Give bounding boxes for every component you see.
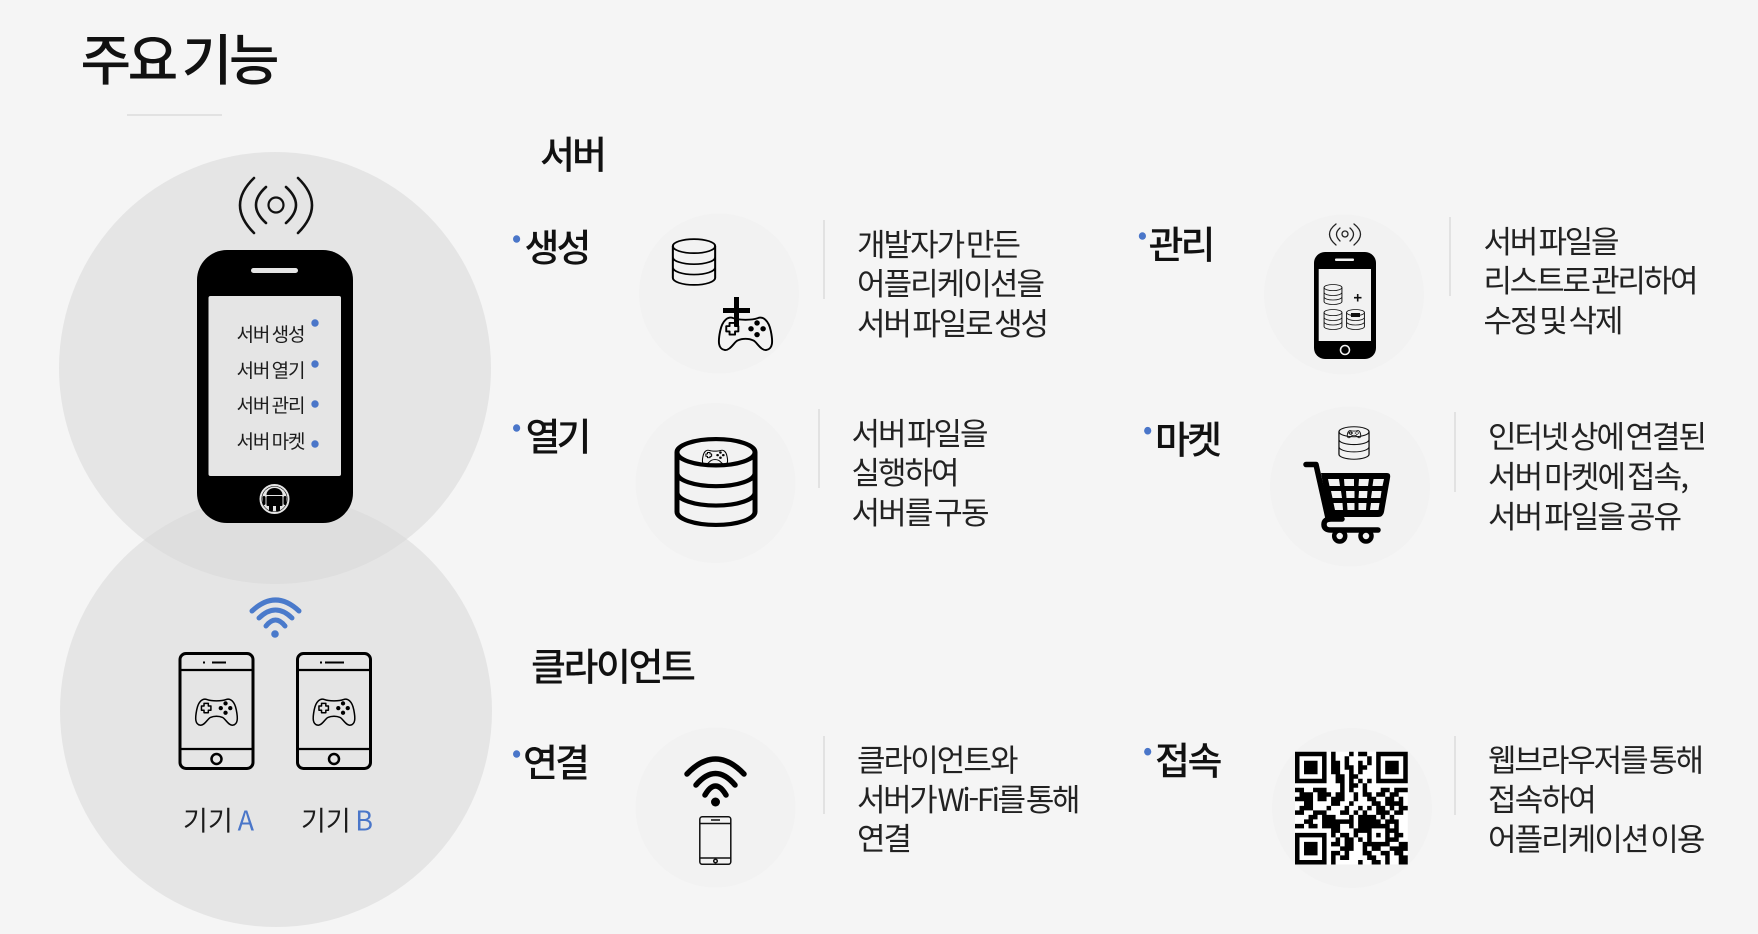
description: 어플리케이션 이용: [1488, 814, 1705, 860]
description: [857, 736, 1080, 859]
bullet: [1139, 232, 1146, 240]
bullet: [1144, 427, 1151, 435]
description: [1484, 217, 1698, 341]
icon: shopping cart: [1306, 464, 1390, 542]
description: 웹브라우저를 통해: [1488, 736, 1704, 780]
panel: access: [1144, 728, 1705, 888]
icon: small phone: [700, 817, 731, 864]
panel: market: [1144, 406, 1707, 566]
item title: 열기: [526, 406, 592, 462]
description: 개발자가 만든: [857, 220, 1021, 265]
description: 리스트로 관리하여: [1484, 256, 1698, 301]
item title: 접속: [1155, 730, 1222, 786]
description: [1488, 736, 1705, 860]
phone menu text: 서버 생성: [236, 320, 306, 347]
description: 실행하여: [852, 448, 960, 493]
icon circle: [636, 403, 796, 563]
icon circle: [636, 728, 796, 888]
description: 서버 파일을: [1484, 217, 1620, 262]
description: 서버 마켓에 접속,: [1488, 452, 1689, 497]
phone menu text: 서버 마켓: [236, 427, 306, 454]
circle: server: [59, 152, 491, 584]
panel: open: [513, 403, 990, 563]
icon: game controller with plus: [719, 297, 772, 350]
item title: 생성: [524, 218, 592, 272]
heading: client: 클라이언트: [531, 636, 696, 692]
title: 주요 기능: [80, 16, 280, 96]
panel: connect: [513, 728, 1080, 888]
bullet: [513, 750, 520, 758]
panel: device illustration: [59, 152, 492, 927]
icon circle: [639, 214, 799, 374]
item title: 관리: [1148, 214, 1216, 270]
icon: database with controller: [677, 439, 755, 525]
description: 어플리케이션을: [857, 259, 1045, 304]
circle overlap: [60, 495, 492, 927]
description: 수정 및 삭제: [1484, 296, 1624, 341]
description: 인터넷 상에 연결된: [1488, 412, 1707, 457]
description: [1488, 412, 1707, 537]
icon circle: [1272, 728, 1432, 888]
icon: QR code: [1295, 752, 1408, 864]
panel: create: [513, 214, 1049, 374]
icon circle: [1270, 406, 1430, 566]
description: 서버를 구동: [852, 488, 990, 533]
phone menu dots: [311, 319, 319, 448]
description: 서버 파일을: [852, 409, 988, 454]
label: device B: 기기 B: [301, 800, 373, 838]
bullet: [513, 235, 520, 243]
circle: client: [60, 495, 492, 927]
phone menu text: 서버 열기: [236, 356, 306, 383]
label: device A: 기기 A: [183, 800, 255, 838]
bullet: [513, 424, 520, 432]
icon: black wifi: [687, 759, 744, 806]
icon: blue wifi: [252, 600, 299, 638]
description: 서버 파일을 공유: [1488, 492, 1682, 537]
icon: device B: [298, 654, 370, 768]
description: 접속하여: [1488, 775, 1597, 820]
description: [857, 220, 1049, 344]
phone menu text: 서버 관리: [236, 391, 306, 418]
heading: server: 서버: [540, 124, 607, 180]
icon: broadcast signal: [240, 178, 312, 233]
panel: manage: [1139, 214, 1698, 374]
icon: device A: [180, 654, 253, 768]
description: 서버 파일로 생성: [857, 299, 1049, 344]
icon: small database: [1339, 427, 1369, 459]
description: 클라이언트와: [857, 736, 1018, 780]
item title: 마켓: [1155, 410, 1222, 464]
icon: database: [673, 239, 715, 285]
icon: server phone: [197, 250, 353, 523]
description: 연결: [857, 814, 912, 859]
description: [852, 409, 990, 533]
description: 서버가 Wi-Fi를 통해: [857, 775, 1080, 820]
icon circle: [1264, 214, 1424, 374]
phone menu text: [236, 320, 306, 454]
bullet: [1144, 748, 1151, 756]
item title: 연결: [523, 732, 590, 788]
icon: phone with server list: [1314, 252, 1376, 359]
icon: broadcast signal small: [1330, 224, 1360, 245]
